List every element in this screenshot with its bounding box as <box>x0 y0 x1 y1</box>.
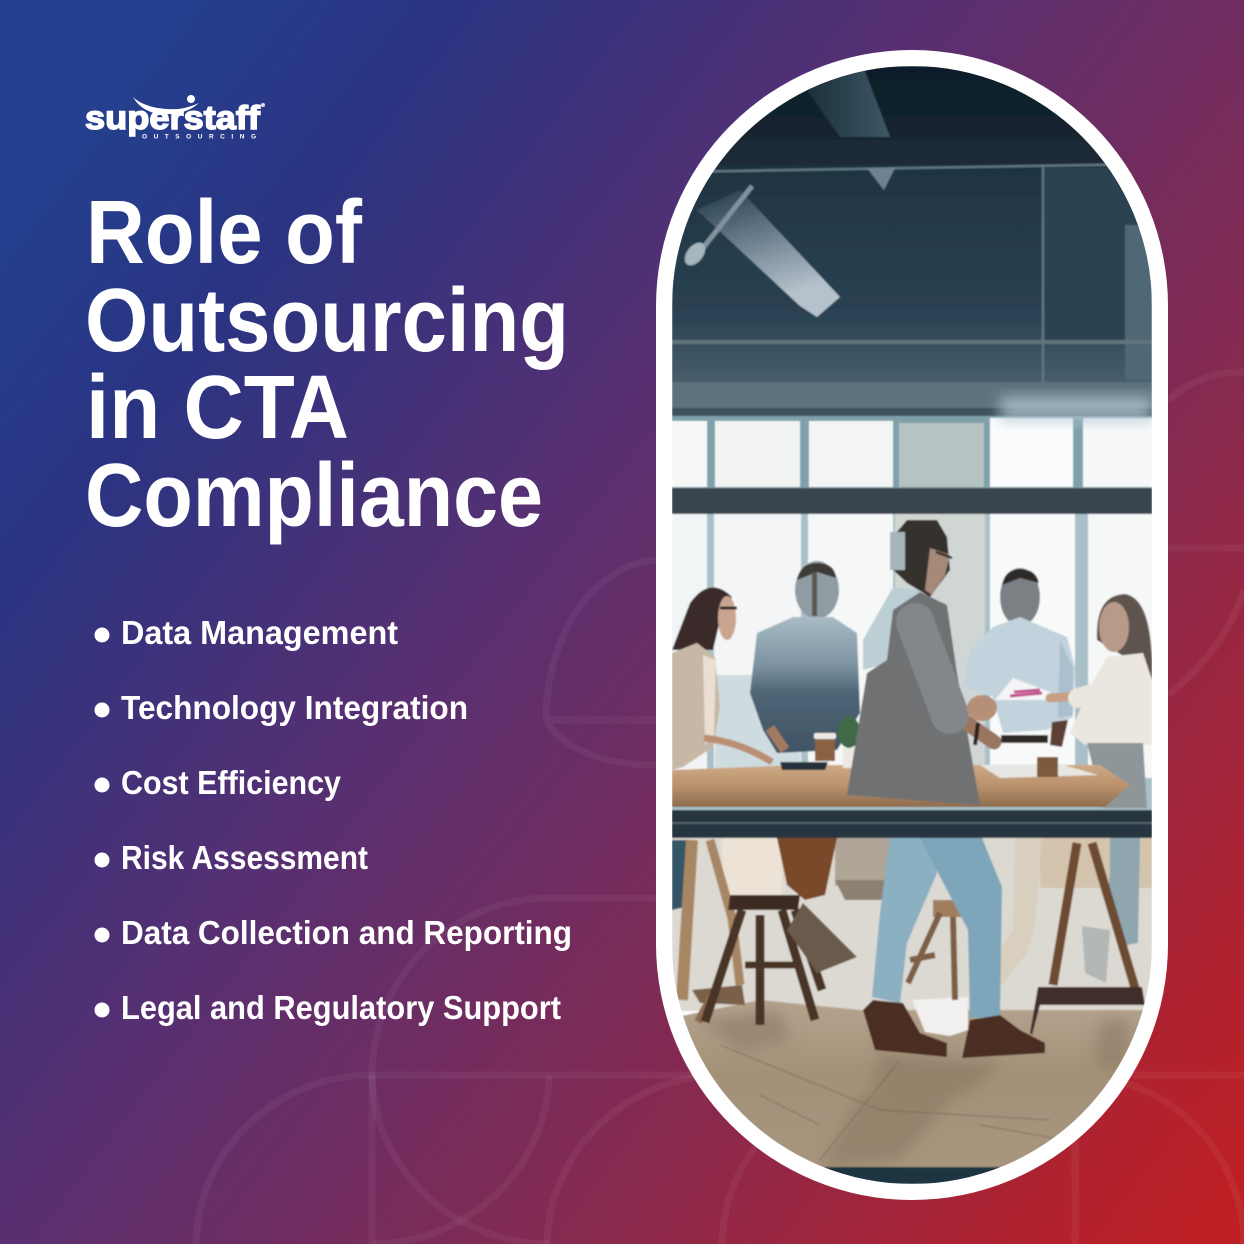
bottom dark band <box>822 1166 1002 1184</box>
man in denim shirt <box>750 561 860 753</box>
dark stool <box>705 895 822 1025</box>
coffee cup right <box>1037 757 1058 777</box>
reflected shoulder <box>863 587 920 670</box>
item: Legal and Regulatory Support: Legal and Regulatory Support <box>121 989 561 1026</box>
title: in CTA <box>86 358 349 458</box>
logo swoosh <box>133 97 199 114</box>
tablet <box>780 762 828 770</box>
logo tagline: OUTSOURCING <box>142 134 256 140</box>
registered mark <box>261 103 265 107</box>
face <box>925 548 950 595</box>
woman at left <box>672 587 772 770</box>
item: Risk Assessment: Risk Assessment <box>121 839 368 876</box>
title <box>85 183 569 546</box>
background legs <box>777 838 1140 987</box>
lower windows <box>672 513 1152 813</box>
papers <box>980 764 1098 778</box>
woman at right <box>1070 594 1152 808</box>
window reflection on head <box>890 532 905 570</box>
right trestle <box>1030 843 1145 1035</box>
forearm <box>958 717 994 742</box>
center man jeans <box>872 838 1002 1018</box>
logo: Superstaff Outsourcing <box>85 95 265 140</box>
cup lid <box>814 733 836 739</box>
item: Technology Integration: Technology Integration <box>121 689 468 726</box>
tan floor <box>682 1000 1143 1168</box>
item: Cost Efficiency: Cost Efficiency <box>121 764 342 801</box>
ceiling <box>672 66 1152 383</box>
ceiling ducts <box>672 66 1152 421</box>
logo wordmark: superstaff <box>85 99 261 136</box>
item: Data Collection and Reporting: Data Collection and Reporting <box>121 914 572 951</box>
center man shoes <box>863 1000 1045 1058</box>
white floor patch between legs <box>912 997 968 1036</box>
photo: team meeting seen through glass <box>672 66 1152 1184</box>
head <box>890 520 950 597</box>
left trestle <box>682 840 745 1022</box>
jacket <box>847 592 980 805</box>
small stool behind center man <box>908 900 962 1000</box>
center man <box>847 520 997 805</box>
upper steel beam <box>672 488 1152 514</box>
floor cracks <box>720 1044 1054 1160</box>
title: Role of <box>86 183 363 283</box>
coffee cup left <box>815 737 835 761</box>
title: Outsourcing <box>85 271 569 371</box>
background watermark pattern <box>196 372 1244 1244</box>
table items <box>780 716 1098 778</box>
hands <box>967 695 997 721</box>
floor shadows <box>700 1010 1130 1170</box>
background leg left <box>672 840 687 910</box>
wrist band <box>975 723 978 745</box>
document handed over <box>995 678 1125 700</box>
item: Data Management: Data Management <box>121 614 398 651</box>
lower room and floor <box>672 836 1152 1184</box>
logo dot <box>187 95 195 103</box>
sleeve <box>915 622 950 715</box>
table <box>672 765 1130 807</box>
plant pot <box>842 748 855 769</box>
glow above right windows <box>1000 396 1152 422</box>
man at right in light shirt <box>963 568 1075 747</box>
upper window band <box>672 416 1152 490</box>
pill photo frame <box>656 50 1168 1200</box>
bullet list <box>94 614 572 1026</box>
title: Compliance <box>85 446 543 546</box>
plant <box>838 716 860 748</box>
lower steel beam <box>672 810 1152 838</box>
glasses <box>936 552 952 558</box>
